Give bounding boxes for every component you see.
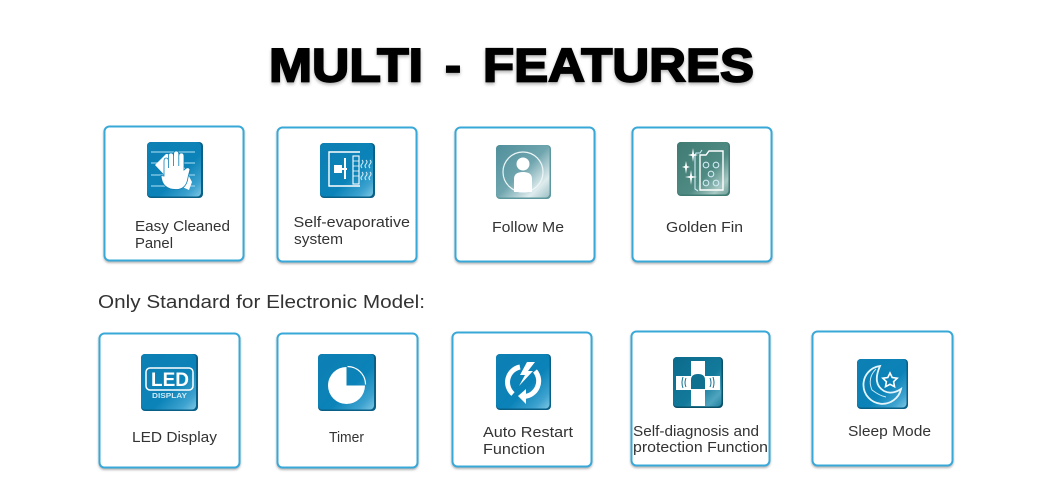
icon: fin with sparkles <box>677 142 730 196</box>
title <box>269 40 754 92</box>
label: Panel <box>135 235 173 252</box>
label: Function <box>483 441 545 458</box>
label <box>135 218 230 252</box>
label: Self-diagnosis and <box>633 423 759 440</box>
panel: LED Display <box>100 334 240 468</box>
label <box>294 214 410 248</box>
panel: Auto Restart Function <box>452 332 592 466</box>
panel: Easy Cleaned Panel <box>104 126 244 260</box>
label: Golden Fin <box>666 219 743 236</box>
icon: medical cross with alarm <box>673 357 723 408</box>
icon: LED display: DISPLAY <box>152 393 187 400</box>
label <box>483 424 574 458</box>
subheading: Only Standard for Electronic Model: <box>98 291 425 312</box>
icon: LED display: LED <box>151 370 189 391</box>
icon: timer pie <box>318 354 376 411</box>
panel: Timer <box>278 334 418 468</box>
panel: Golden Fin <box>632 128 772 262</box>
label <box>633 423 768 456</box>
panel: Sleep Mode <box>812 332 952 466</box>
label: Easy Cleaned <box>135 218 230 235</box>
label: Timer <box>329 430 364 446</box>
panel: Follow Me <box>456 128 594 262</box>
panel: Self-diagnosis and protection Function <box>632 332 770 466</box>
title: FEATURES <box>483 40 754 92</box>
icon: hand wiping panel <box>147 142 203 198</box>
label: LED Display <box>132 429 218 446</box>
icon: restart arrows with bolt <box>496 354 551 410</box>
title: - <box>445 40 461 92</box>
label: Follow Me <box>492 219 564 236</box>
icon: evaporator diagram <box>320 143 375 198</box>
title: MULTI <box>269 40 423 92</box>
icon: LED display <box>141 354 198 411</box>
label: system <box>294 231 343 248</box>
icon: moon and star <box>857 359 908 409</box>
label: Sleep Mode <box>848 423 931 440</box>
label: Self-evaporative <box>294 214 410 231</box>
icon: person in circle <box>496 145 551 199</box>
panel: Self-evaporative system <box>278 128 416 262</box>
label: protection Function <box>633 439 768 456</box>
label: Auto Restart <box>483 424 574 441</box>
